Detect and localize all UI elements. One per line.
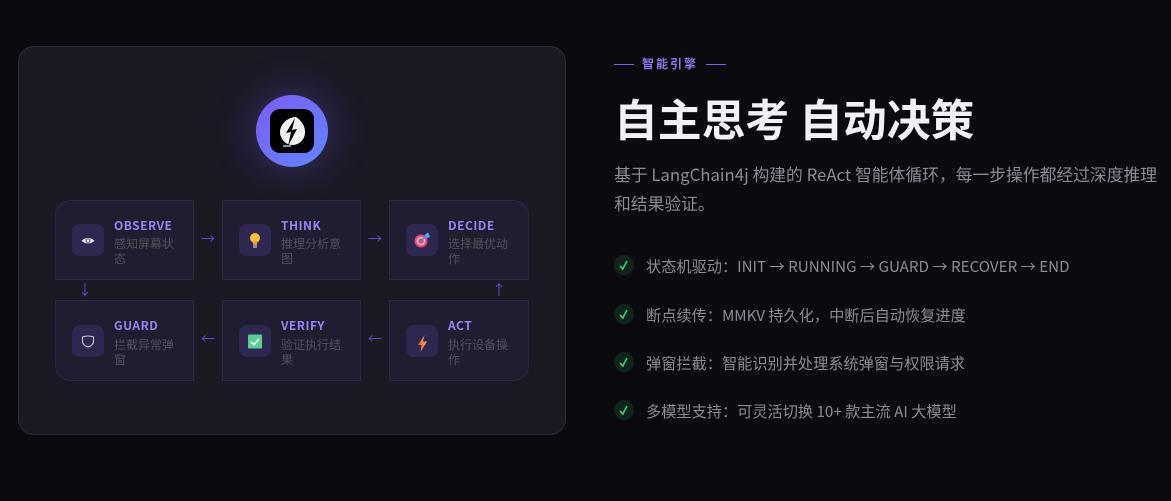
feature: state machine [614,255,1070,277]
icon: check [614,304,634,324]
step description: 推理分析意图 [281,235,341,267]
description: 基于 LangChain4j 构建的 ReAct 智能体循环，每一步操作都经过深度推理 [614,162,1157,186]
icon: eye [72,224,104,256]
arrow: → [368,228,382,249]
step description: 选择最优动作 [448,235,508,267]
step description: 验证执行结果 [281,336,341,368]
step title: GUARD [114,317,158,334]
card: DECIDE [389,200,529,280]
icon: check [614,400,634,420]
card: GUARD [55,300,194,381]
feature: multi-model [614,400,957,422]
arrow: ← [201,328,215,349]
feature text: 断点续传：MMKV 持久化，中断后自动恢复进度 [646,304,966,326]
step description: 感知屏幕状态 [114,235,174,267]
step title: DECIDE [448,217,495,234]
panel: agent loop [18,46,566,435]
card: VERIFY [222,300,361,381]
arrow: ↑ [492,279,506,300]
icon: target [406,224,438,256]
icon: lightning [406,325,438,357]
step description: 执行设备操作 [448,336,508,368]
card: ACT [389,300,529,381]
step title: THINK [281,217,321,234]
icon: app logo [256,95,328,167]
arrow: → [201,228,215,249]
step title: VERIFY [281,317,325,334]
step title: OBSERVE [114,217,172,234]
icon: check [614,255,634,275]
feature text: 状态机驱动：INIT → RUNNING → GUARD → RECOVER → END [646,255,1070,277]
feature: resume [614,304,966,326]
eyebrow label: 智能引擎 [642,55,698,72]
icon: check [614,352,634,372]
step description: 拦截异常弹窗 [114,336,174,368]
description: 和结果验证。 [614,191,715,215]
arrow: ↓ [78,279,92,300]
title: 自主思考 自动决策 [614,85,974,149]
card: OBSERVE [55,200,194,280]
arrow: ← [368,328,382,349]
icon: light bulb [239,224,271,256]
card: THINK [222,200,361,280]
feature text: 弹窗拦截：智能识别并处理系统弹窗与权限请求 [646,352,965,374]
icon: shield [72,325,104,357]
feature text: 多模型支持：可灵活切换 10+ 款主流 AI 大模型 [646,400,957,422]
description [614,162,1157,215]
step title: ACT [448,317,472,334]
icon: check box [239,325,271,357]
feature: popup blocking [614,352,965,374]
